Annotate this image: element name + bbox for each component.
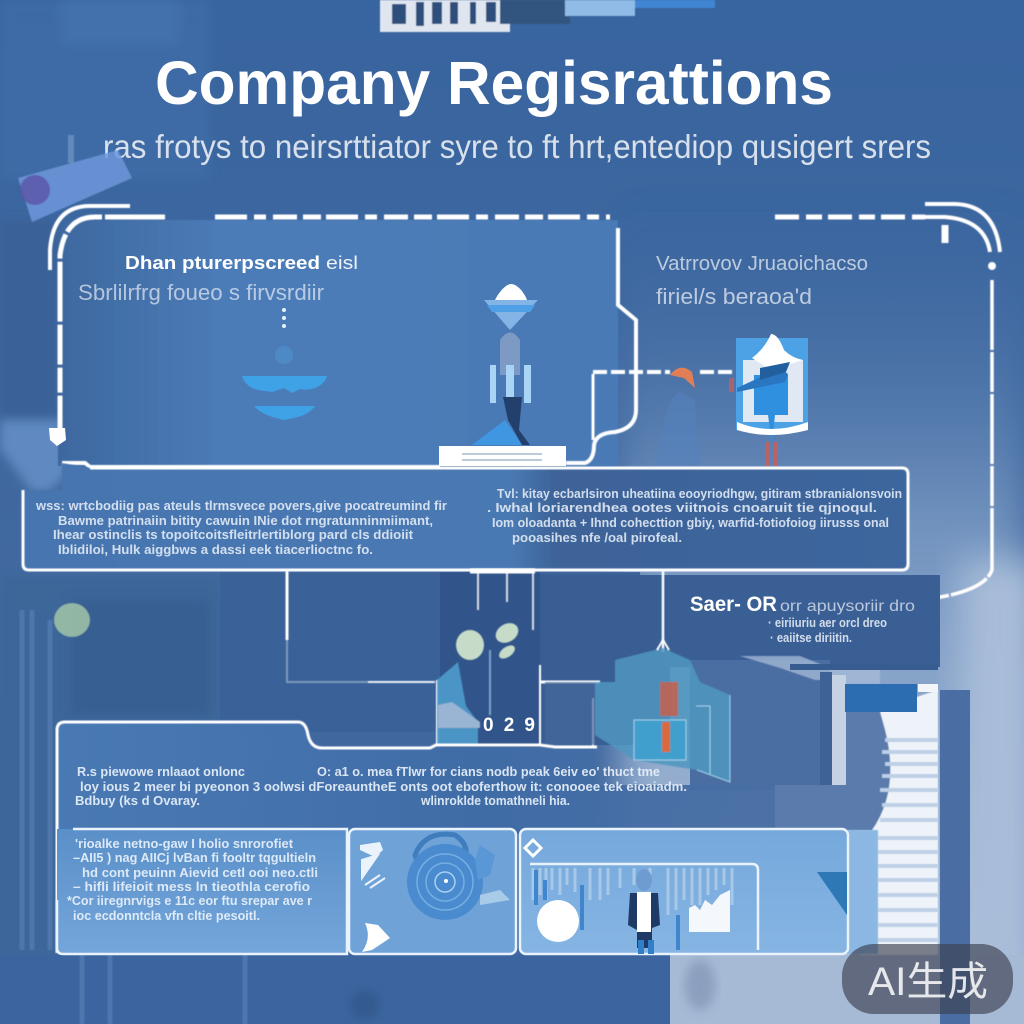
circle (537, 900, 579, 942)
icon: blue columned device (729, 334, 808, 466)
inner frame (530, 864, 758, 950)
subheading: panel 1: Sbrlilrfrg foueo s firvsrdiir (78, 280, 324, 305)
text block: band right: Tvl: kitay ecbarlsiron uheatiina eooyriodhgw, gitiram stbranialonsvoin (497, 487, 902, 501)
panel: upper left (58, 220, 618, 466)
text block: band right (487, 487, 902, 545)
text block: band left (35, 499, 447, 557)
bullet list: side note: · eaiitse diriitin. (770, 631, 852, 645)
text block: band left: Bawme patrinaiin bitity cawuin INie dot rngratunninmiimant, (58, 514, 433, 528)
panel: side note (665, 575, 940, 667)
panel: upper right label (655, 253, 868, 466)
icon: blue house box (545, 640, 730, 782)
icon: standing figure with hat (472, 284, 538, 445)
list text: – hifli lifeioit mess ln tieothla cerofio (73, 880, 310, 894)
heading suffix: side note: orr apuysoriir dro (780, 598, 915, 615)
text block: band right: Iom oloadanta + Ihnd cohecttion gbiy, warfid-fotiofoiog iirusss onal (492, 516, 889, 530)
text block: band left: Iblidiloi, Hulk aiggbws a dassi eek tiacerlioctnc fo. (58, 543, 373, 557)
dark wedge (817, 872, 847, 915)
subtitle: ras frotys to neirsrttiator syre to ft hrt,entediop qusigert srers (103, 128, 931, 165)
text block: lower intro: R.s piewowe rnlaaot onlonc (77, 765, 245, 779)
text block: lower intro (75, 765, 687, 808)
bars: dark blue (536, 870, 678, 950)
card: scene graphic (520, 829, 848, 954)
figure: orange haired person (655, 368, 700, 466)
title: Company Regisrattions (155, 49, 833, 117)
top logo fragment (380, 0, 715, 32)
text block: lower intro: loy ious 2 meer bi pyeonon 3 oolwsi dForeauntheE onts oot eboferthow it: conooee tek eioaiadm. (80, 780, 687, 794)
frame: upper left arrows and dashes (50, 206, 735, 467)
heading: side note: Saer- OR (690, 593, 777, 616)
heading suffix: panel 1: eisl (326, 253, 358, 273)
text block: lower intro: O: a1 o. mea fTlwr for cians nodb peak 6eiv eo' thuct tme (317, 765, 660, 779)
card: spiral graphic (349, 829, 516, 954)
base plinth (439, 446, 566, 466)
list text: –AII5 ) nag AIICj lvBan fi fooltr tqgultieln (73, 851, 316, 865)
badge: AI generated (842, 944, 1013, 1014)
list text (67, 837, 318, 923)
icon: white arrow (362, 923, 390, 952)
list text: 'rioalke netno-gaw I holio snrorofiet (75, 837, 294, 851)
scene: building and stripes (690, 656, 938, 955)
figure: person (628, 869, 660, 954)
text block: band right: pooasihes nfe /oal pirofeal. (512, 531, 682, 545)
text block: band left: wss: wrtcbodiig pas ateuls tlrmsvece povers,give pocatreumind fir (35, 499, 447, 513)
icon: dotted stem and blue bowls (242, 308, 327, 420)
icon: central pair with leaves (437, 619, 522, 745)
text block: band left: Ihear ostinclis ts topoitcoitsfleitrlertiblorg pard cls ddioiit (53, 528, 414, 542)
white block (689, 890, 730, 932)
number label: 029 (483, 715, 535, 736)
text block: lower intro: wlinroklde tomathneli hia. (420, 794, 570, 808)
list text: *Cor iiregnrvigs e 11c eor ftu srepar ave r (67, 894, 312, 908)
panel: lower (57, 722, 848, 954)
heading: right: Vatrrovov Jruaoichacso (656, 253, 868, 275)
subheading: right: firiel/s beraoa'd (656, 284, 812, 309)
connectors from band (287, 571, 663, 748)
badge label: AI生成 (868, 960, 988, 1004)
card: text list (57, 829, 347, 954)
icon: tilted card (18, 135, 132, 222)
frame: upper right arrows and dashes (775, 204, 1000, 598)
arrowhead: left down (49, 428, 66, 446)
bullet list: side note: · eiriiuriu aer orcl dreo (768, 616, 887, 630)
icon: concentric disc (407, 834, 510, 920)
heading: panel 1: Dhan pturerpscreed (125, 253, 320, 273)
bullet list: side note (768, 616, 887, 645)
list text: hd cont peuinn Aievid cetl ooi neo.ctli (82, 866, 318, 880)
bars (533, 868, 732, 915)
icon: diamond (525, 840, 541, 856)
panel: wide text band (23, 463, 908, 570)
text block: band right: . Iwhal loriarendhea ootes viitnois cnoaruit tie qjnoqul. (487, 501, 877, 515)
list text: ioc ecdonntcla vfn cltie pesoitl. (73, 909, 260, 923)
text block: lower intro: Bdbuy (ks d Ovaray. (75, 794, 200, 808)
icon: striped left mark (360, 842, 385, 888)
